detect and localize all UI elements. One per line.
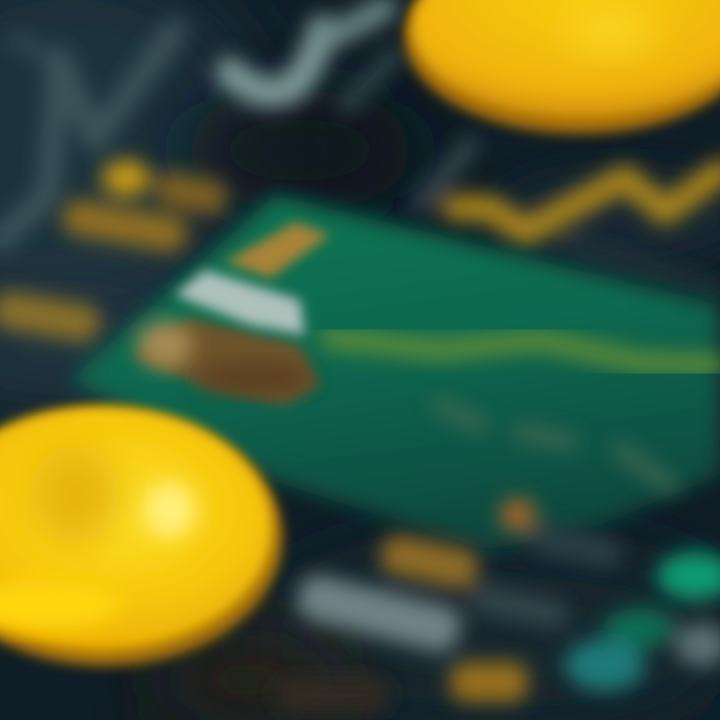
coin: bottom left <box>0 406 283 666</box>
gold line chart: upper right <box>420 145 720 290</box>
chart lines: grey top left <box>0 30 175 240</box>
grey symbol: top centre <box>230 8 395 105</box>
card: faint lines <box>440 405 670 485</box>
card chip <box>135 222 330 405</box>
green card <box>70 195 720 550</box>
bottom labels and tags <box>275 498 720 712</box>
coin: top right <box>404 0 720 134</box>
gold text blocks: upper left <box>0 160 230 345</box>
card: gold line <box>330 338 715 365</box>
